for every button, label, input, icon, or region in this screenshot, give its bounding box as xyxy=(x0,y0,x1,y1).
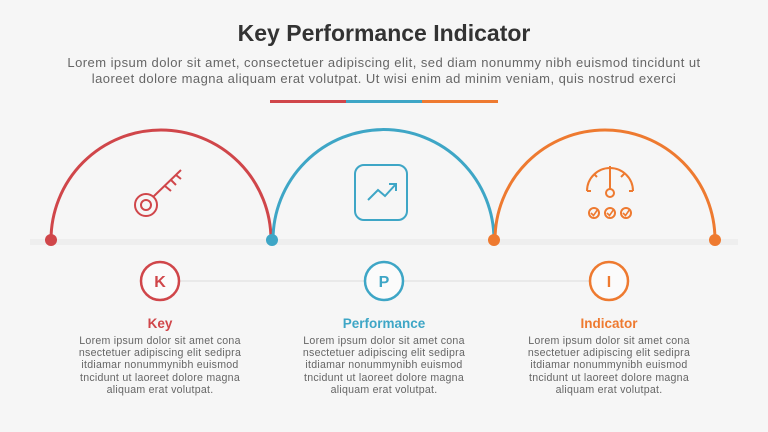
column: key xyxy=(79,316,241,396)
column: key: Lorem ipsum dolor sit amet cona xyxy=(79,335,241,347)
color divider xyxy=(270,100,498,103)
column: performance: Performance xyxy=(343,316,425,331)
icon: gauge xyxy=(587,166,633,218)
arc: performance xyxy=(266,130,494,246)
column: key: aliquam erat volutpat. xyxy=(107,384,213,396)
icon: chart xyxy=(355,165,407,220)
diagram: I xyxy=(607,274,611,291)
column: indicator: Indicator xyxy=(580,316,638,331)
arc: indicator xyxy=(488,130,721,246)
column: performance: aliquam erat volutpat. xyxy=(331,384,437,396)
column: performance: Lorem ipsum dolor sit amet cona xyxy=(303,335,465,347)
column: performance: nsectetuer adipiscing elit sedipra xyxy=(303,347,465,359)
column: indicator: aliquam erat volutpat. xyxy=(556,384,662,396)
column: performance xyxy=(303,316,465,396)
title: Key Performance Indicator xyxy=(238,20,530,46)
column: performance: tncidunt ut laoreet dolore magna xyxy=(304,372,464,384)
column: key: Key xyxy=(148,316,172,331)
column: indicator: nsectetuer adipiscing elit sedipra xyxy=(528,347,690,359)
subtitle text xyxy=(67,55,701,86)
letter circles xyxy=(141,262,628,300)
column: indicator xyxy=(528,316,690,396)
diagram: P xyxy=(379,274,390,291)
column: key: tncidunt ut laoreet dolore magna xyxy=(80,372,240,384)
column: key: itdiamar nonummynibh euismod xyxy=(81,359,239,371)
subtitle text: laoreet dolore magna aliquam erat volutpat. Ut wisi enim ad minim veniam, quis nostrud exerci xyxy=(92,71,676,86)
column: indicator: itdiamar nonummynibh euismod xyxy=(530,359,688,371)
diagram: K xyxy=(154,274,166,291)
subtitle text: Lorem ipsum dolor sit amet, consectetuer adipiscing elit, sed diam nonummy nibh euismod tincidunt ut xyxy=(67,55,701,70)
column: performance: itdiamar nonummynibh euismod xyxy=(305,359,463,371)
icon: key xyxy=(135,170,181,216)
arc: key xyxy=(45,130,271,246)
column: key: nsectetuer adipiscing elit sedipra xyxy=(79,347,241,359)
column: indicator: tncidunt ut laoreet dolore magna xyxy=(529,372,689,384)
column: indicator: Lorem ipsum dolor sit amet cona xyxy=(528,335,690,347)
